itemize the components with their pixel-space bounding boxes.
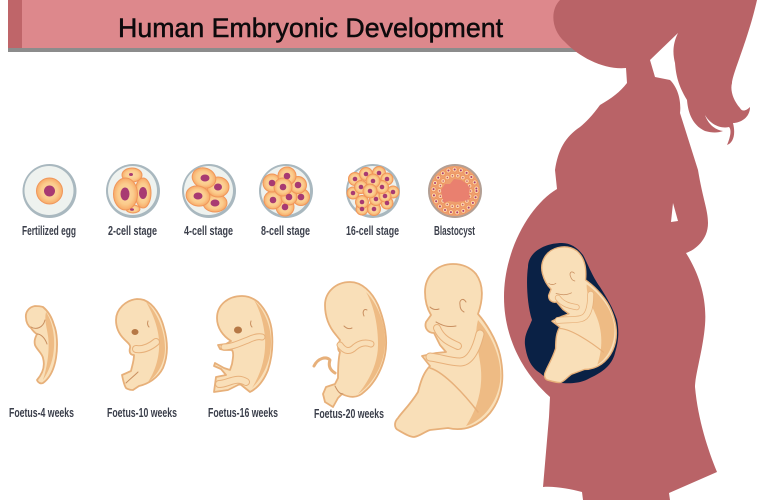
label: 4-cell stage: 4-cell stage — [184, 223, 233, 238]
foetus: full term — [395, 264, 502, 437]
stage: blastocyst — [428, 164, 482, 218]
pregnant woman silhouette — [504, 0, 757, 500]
label: foetus 20 weeks: Foetus-20 weeks — [314, 406, 384, 421]
stage: fertilized egg — [22, 164, 76, 218]
label: 8-cell stage: 8-cell stage — [261, 223, 310, 238]
title banner — [8, 0, 608, 52]
stage: 16-cell — [346, 164, 400, 218]
stage: 4-cell — [182, 164, 236, 218]
label: foetus 16 weeks: Foetus-16 weeks — [208, 405, 278, 420]
label: 2-cell stage: 2-cell stage — [108, 223, 157, 238]
blastocyst cavity — [441, 179, 470, 203]
foetus: 4 weeks — [26, 306, 57, 383]
stage: 8-cell — [259, 164, 313, 218]
foetus in womb — [515, 239, 626, 386]
label: fertilized egg: Fertilized egg — [22, 223, 76, 238]
foetus: 20 weeks — [314, 282, 386, 407]
title: Human Embryonic Development — [118, 13, 503, 43]
label: 16-cell stage: 16-cell stage — [346, 223, 399, 238]
label: foetus 4 weeks: Foetus-4 weeks — [9, 405, 74, 420]
foetus: 10 weeks — [116, 299, 167, 390]
label: foetus 10 weeks: Foetus-10 weeks — [107, 405, 177, 420]
foetus: 16 weeks — [214, 296, 272, 392]
label: blastocyst: Blastocyst — [434, 223, 475, 238]
stage: 2-cell — [106, 164, 160, 218]
womb — [525, 243, 618, 383]
